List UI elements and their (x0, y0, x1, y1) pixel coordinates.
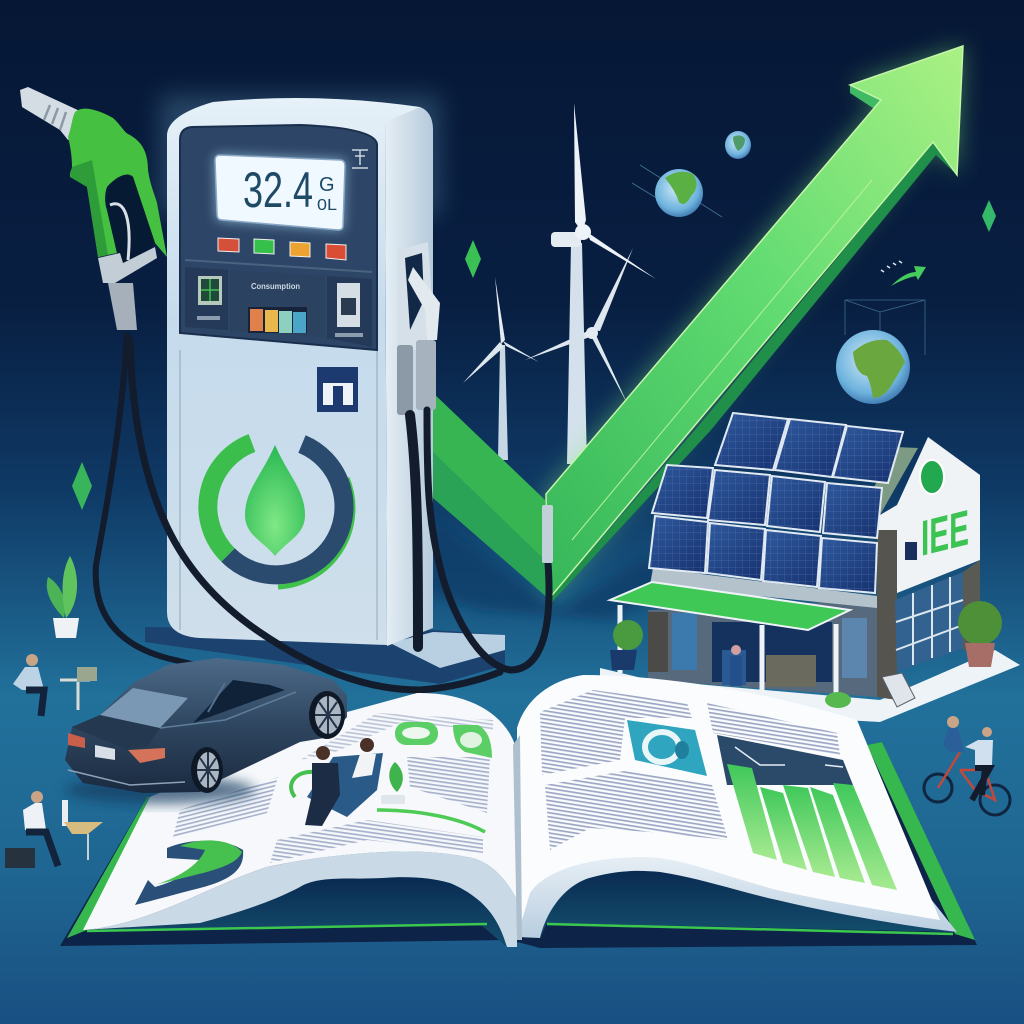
gable wall (877, 437, 980, 593)
person at desk lower left (5, 791, 103, 868)
control panel (180, 125, 377, 350)
left page block (83, 852, 517, 947)
building with solar panels (600, 413, 1020, 722)
page green rule (377, 810, 485, 832)
fuel drop emblem (208, 443, 353, 587)
building sign: IEE (921, 499, 969, 567)
awning (610, 582, 850, 630)
fuel display: G (319, 174, 335, 196)
page icons (395, 720, 707, 776)
plant pots (610, 601, 1002, 670)
right hand nozzle (397, 242, 440, 415)
left page (83, 693, 517, 930)
bar chart (717, 735, 897, 890)
pump base (145, 627, 505, 684)
car shadow (65, 776, 255, 804)
wind turbines (463, 103, 656, 464)
panel corner mark (352, 150, 368, 168)
fuel display: 32.4 (243, 162, 313, 218)
plant left (47, 556, 79, 638)
left page text (173, 713, 493, 863)
cyclists (924, 716, 1010, 815)
indicator lights (218, 238, 346, 260)
green lines inside cover (87, 924, 953, 934)
spine (513, 735, 522, 940)
lower control panels: Consumption (251, 282, 300, 291)
brick side (877, 530, 897, 700)
hoses (96, 335, 549, 690)
right page text (540, 690, 840, 850)
pump front (167, 98, 420, 645)
windows (895, 572, 963, 672)
small green shrub (825, 692, 851, 708)
sign board (882, 673, 915, 707)
pump logo (317, 367, 358, 412)
curved arrow emblem (135, 840, 243, 905)
front wall (648, 600, 877, 697)
roof edge (862, 447, 918, 515)
person at desk upper left (13, 654, 97, 716)
hose connector (542, 505, 553, 563)
open book (60, 675, 977, 948)
shop front details (648, 612, 867, 687)
pump glow (160, 95, 440, 215)
fuel display (215, 155, 345, 230)
porch posts (620, 605, 836, 693)
fuel pump (145, 95, 505, 684)
cover green edges (67, 797, 160, 938)
building sign (905, 460, 969, 567)
display glow (215, 155, 345, 230)
fuel nozzle (20, 87, 167, 330)
ground shadow (420, 520, 780, 620)
solar panels (649, 413, 903, 593)
growth arrow (433, 46, 963, 602)
globes and floating icons (72, 131, 996, 510)
solar cell grid (649, 413, 903, 593)
people on sofa (291, 738, 405, 826)
platform (600, 650, 1020, 722)
pump side (385, 107, 433, 646)
lower control panels (185, 260, 372, 347)
car (65, 658, 347, 793)
inner dark gaps (87, 877, 507, 947)
right page block (517, 820, 957, 938)
right page (517, 675, 940, 937)
shop visitor (730, 645, 742, 686)
book cover (60, 742, 977, 948)
fuel display: 0L (317, 197, 337, 214)
